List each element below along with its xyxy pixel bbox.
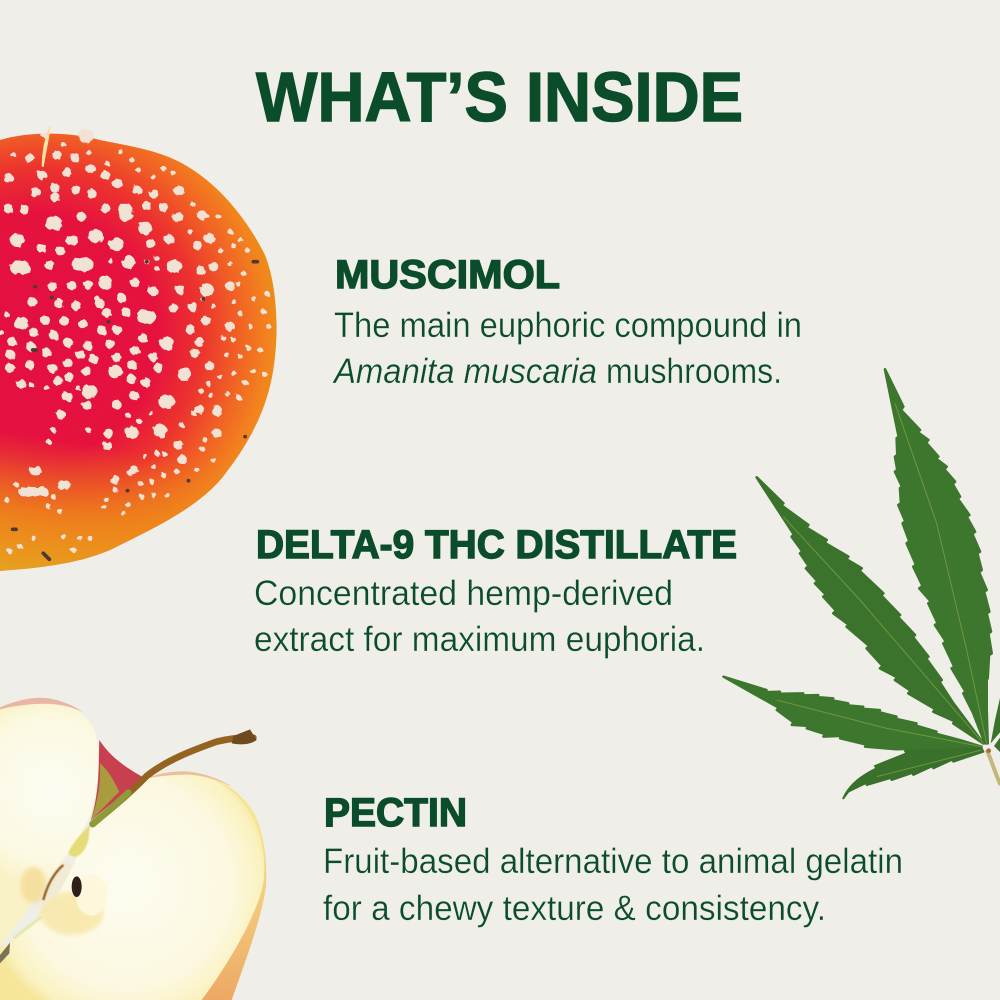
heading: delta-9 thc distillate: DELTA-9 THC DISTILLATE <box>256 523 737 567</box>
text: delta-9 description: Concentrated hemp-derived <box>254 574 673 613</box>
text: delta-9 description: extract for maximum euphoria. <box>254 620 705 659</box>
cap tear <box>43 127 50 167</box>
text: pectin description: Fruit-based alternative to animal gelatin <box>323 842 903 881</box>
right apple half <box>0 771 266 1000</box>
title: WHAT’S INSIDE <box>256 58 743 136</box>
heading: muscimol: MUSCIMOL <box>335 253 560 297</box>
dark flecks <box>13 262 257 559</box>
left apple half <box>0 698 99 945</box>
text: pectin description <box>323 842 903 928</box>
apple image <box>0 698 266 1000</box>
large warts <box>17 136 207 433</box>
small warts <box>2 135 269 552</box>
text: pectin description: for a chewy texture & consistency. <box>323 889 826 928</box>
top leaflet <box>885 369 992 743</box>
text: muscimol description: Amanita muscaria <box>332 352 597 391</box>
fourth leaflet <box>843 748 983 798</box>
apple stem <box>93 738 253 824</box>
third leaflet <box>723 677 982 749</box>
apple skin behind stem <box>91 740 143 821</box>
text: delta-9 description <box>254 574 705 659</box>
small right leaflets <box>991 695 1000 753</box>
text: muscimol description <box>332 306 802 391</box>
hemp leaf image <box>723 369 1000 798</box>
midribs <box>777 403 987 777</box>
heading: pectin: PECTIN <box>324 791 467 835</box>
second leaflet <box>757 477 983 743</box>
medium warts <box>8 155 230 492</box>
text: muscimol description: The main euphoric compound in <box>334 306 802 345</box>
mushroom cap image <box>0 127 277 571</box>
text: muscimol description: mushrooms. <box>606 352 782 391</box>
apple core <box>0 825 108 963</box>
